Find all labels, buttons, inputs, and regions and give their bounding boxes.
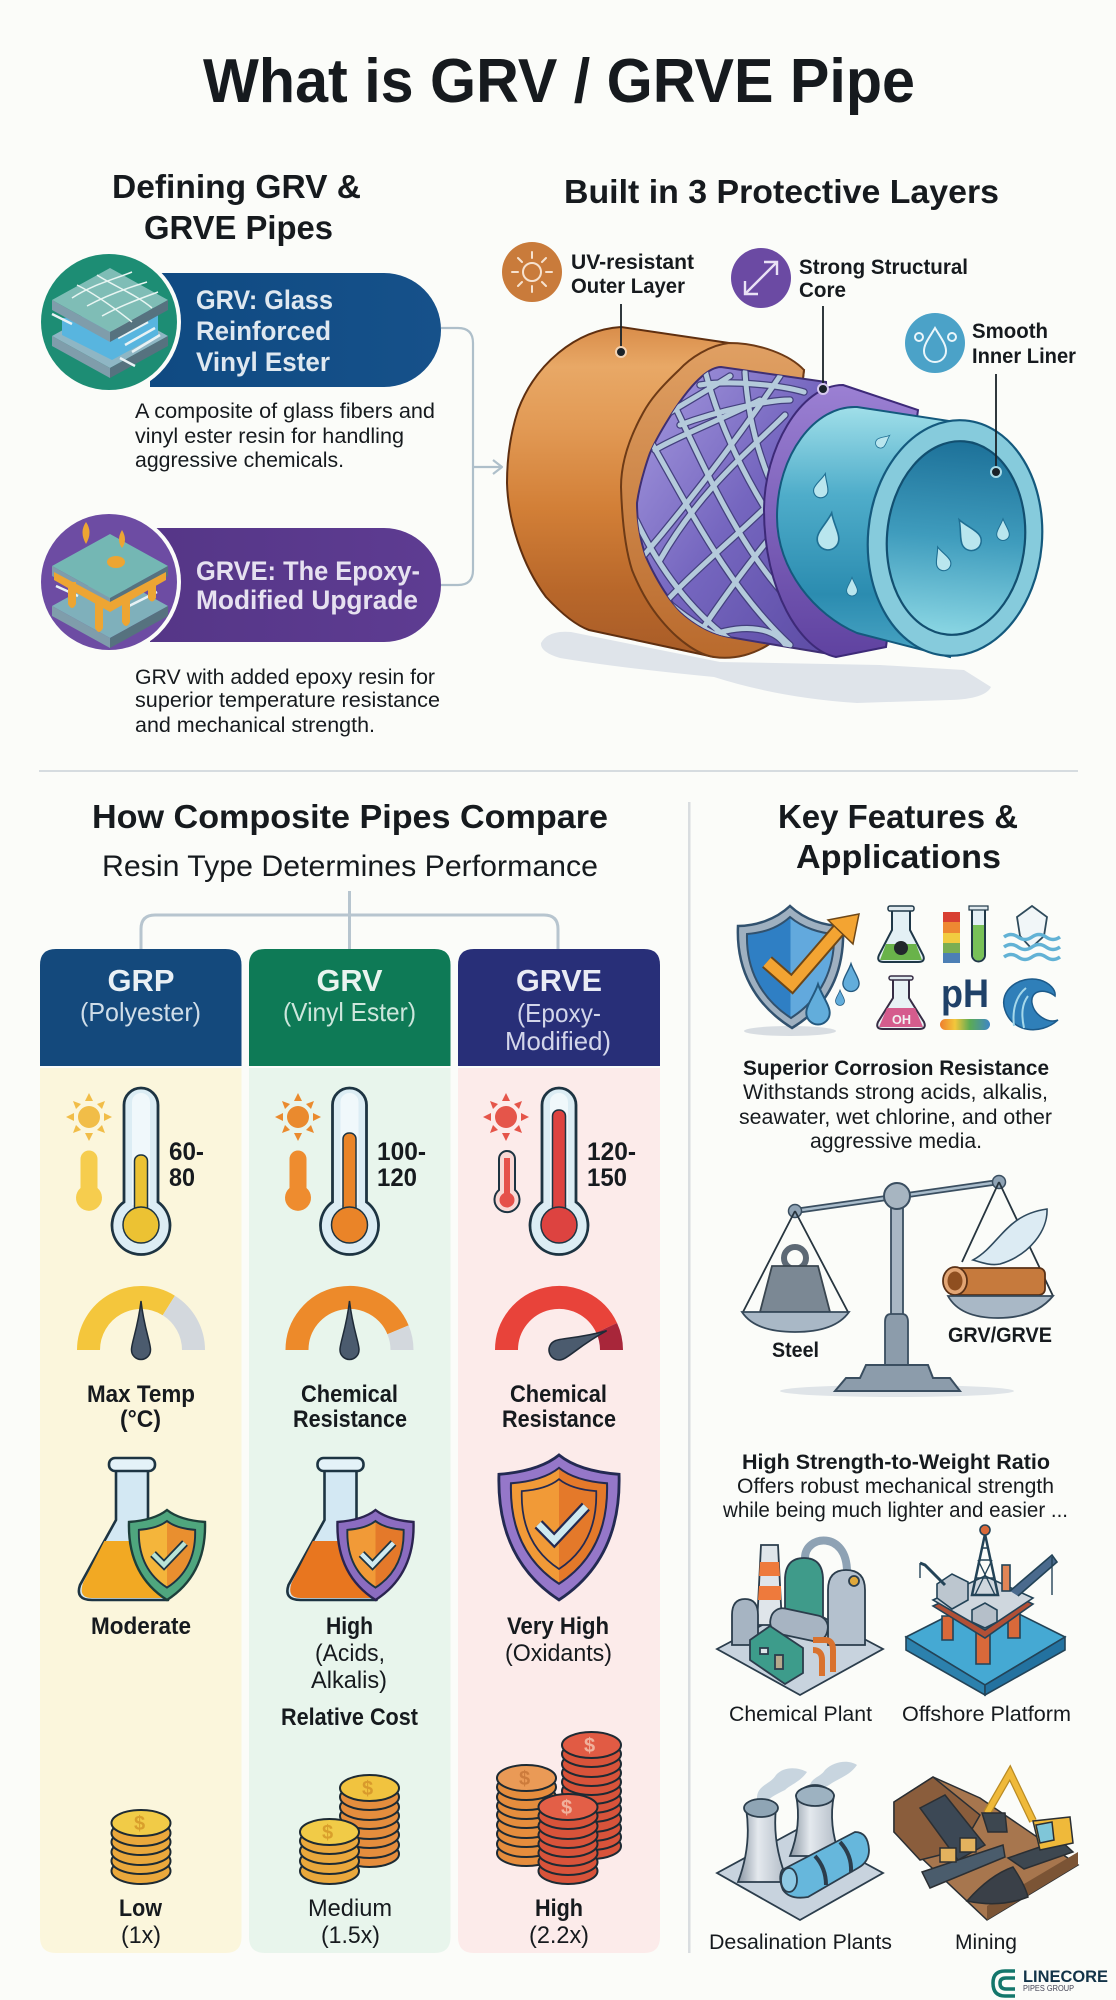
icon: mining site (894, 1773, 1078, 1920)
value: 60-80 (169, 1138, 204, 1192)
pill: GRV (150, 273, 441, 387)
icon: flask with green shield (79, 1458, 205, 1600)
text: strength-to-weight (722, 1451, 1068, 1522)
label: chemical resistance: Resistance (293, 1406, 407, 1433)
icon: GRVE layered composite (37, 510, 181, 654)
value: very high oxidants: (Oxidants) (505, 1640, 612, 1667)
woven purple core (636, 367, 836, 655)
text: corrosion resistance: seawater, wet chlorine, and other (739, 1106, 1052, 1129)
thermometer: GRV (320, 1088, 378, 1254)
gauge: GRP (88, 1298, 194, 1360)
label: max temp (87, 1381, 195, 1433)
value: high acids alkalis: High (326, 1613, 373, 1640)
text: GRV description: vinyl ester resin for handling (135, 425, 404, 448)
icon: small thermometer (76, 1150, 102, 1211)
label: steel: Steel (772, 1339, 819, 1362)
icon: sun (483, 1093, 529, 1141)
value: very high oxidants: Very High (507, 1613, 609, 1640)
value: 120-150: 150 (587, 1164, 627, 1192)
column connector (141, 891, 558, 949)
value: low: Low (119, 1895, 162, 1922)
value: high cost: High (535, 1895, 583, 1922)
icon: shield with arrow check (738, 906, 859, 1036)
value: high cost: (2.2x) (529, 1922, 589, 1949)
text: GRVE description: GRV with added epoxy resin for (135, 666, 435, 689)
label: chemical resistance (502, 1381, 616, 1433)
text: strength-to-weight: Offers robust mechanical strength (737, 1475, 1054, 1498)
icon: pH label and bar: pH (941, 972, 989, 1016)
panel: protective layers (502, 173, 1076, 703)
pipe illustration (507, 327, 1052, 663)
label: desalination plants: Desalination Plants (709, 1931, 892, 1954)
header: GRVE: (Epoxy- (517, 998, 601, 1028)
header: GRP: (Polyester) (80, 997, 201, 1027)
orange outer layer (507, 327, 804, 658)
pipe shadow (541, 632, 991, 703)
icon: coin stacks medium: $ (322, 1822, 333, 1844)
callout: UV-resistant outer layer (502, 242, 694, 357)
label: GRV/GRVE: GRV/GRVE (948, 1324, 1052, 1347)
value: 60-80: 60- (169, 1138, 204, 1166)
right pan (948, 1296, 1053, 1318)
pill: GRV: GRV: Glass (196, 285, 333, 315)
value: low: (1x) (121, 1922, 161, 1949)
composite pipe on pan (943, 1267, 1045, 1295)
callout: strong structural core: Core (799, 279, 846, 302)
value: 100-120: 100- (377, 1138, 426, 1166)
icon: green flask (878, 906, 924, 962)
icon: pink flask OH (877, 976, 925, 1029)
icon: coin stacks medium (300, 1775, 399, 1884)
heading: features: Key Features & (778, 798, 1018, 835)
heading: features (778, 798, 1018, 875)
callout: strong structural core (731, 248, 968, 394)
icon: pH label and bar (940, 972, 990, 1030)
pill: GRVE (150, 528, 441, 642)
heading: defining: Defining GRV & (112, 168, 361, 205)
label: chemical resistance: Resistance (502, 1406, 616, 1433)
icon: offshore platform (906, 1525, 1065, 1695)
thermometer: GRVE (530, 1088, 588, 1254)
blue tube mouth (858, 413, 1052, 663)
value: high acids alkalis: (Acids, (315, 1640, 385, 1667)
column: GRV (249, 949, 450, 1953)
text: GRV description (135, 400, 435, 472)
label: mining: Mining (955, 1931, 1017, 1954)
icon: small thermometer (285, 1150, 311, 1211)
value: moderate: Moderate (91, 1613, 191, 1640)
label: chemical resistance: Chemical (301, 1381, 398, 1408)
value: high acids alkalis (311, 1613, 387, 1694)
icon: flask with purple shield (287, 1458, 414, 1600)
header: GRV: GRV (316, 963, 383, 998)
logo: LINECORE (1023, 1967, 1108, 1986)
header: GRVE: GRVE (516, 963, 602, 998)
icon: desalination plant (717, 1762, 883, 1920)
pill: GRV: Vinyl Ester (196, 347, 330, 377)
column: GRVE (458, 949, 660, 1953)
callout: smooth inner liner: Smooth (972, 320, 1048, 343)
header: GRP (40, 949, 242, 1066)
label: chemical resistance (293, 1381, 407, 1433)
value: high acids alkalis: Alkalis) (311, 1667, 387, 1694)
icon: coin stack low (112, 1810, 170, 1884)
callout: smooth inner liner: Inner Liner (972, 345, 1076, 368)
column: GRP (40, 949, 242, 1953)
value: very high oxidants (505, 1613, 612, 1667)
water droplets (812, 432, 1009, 596)
left pan (742, 1312, 849, 1332)
value: 100-120 (377, 1138, 426, 1192)
gauge: GRV (297, 1297, 402, 1360)
text: GRV description: aggressive chemicals. (135, 449, 344, 472)
text: GRVE description (135, 666, 440, 737)
subheading: Resin Type Determines Performance (102, 850, 598, 883)
text: GRV description: A composite of glass fibers and (135, 400, 435, 423)
label: chemical resistance: Chemical (510, 1381, 607, 1408)
header: GRV (249, 949, 450, 1066)
label: max temp: (°C) (120, 1406, 161, 1433)
callout: UV-resistant outer layer: Outer Layer (571, 275, 685, 298)
icon: sun (66, 1093, 112, 1141)
label: chemical plant: Chemical Plant (729, 1703, 872, 1726)
icon: sun (275, 1093, 321, 1141)
panel: defining GRV and GRVE (37, 168, 502, 737)
panel: key features and applications (709, 798, 1108, 1996)
pill: GRVE: GRVE: The Epoxy- (196, 556, 420, 586)
header: GRP: GRP (108, 963, 174, 998)
header: GRVE (458, 949, 660, 1066)
icon: coin stacks medium: $ (362, 1778, 373, 1800)
body: GRP (40, 1068, 242, 1953)
logo: PIPES GROUP (1023, 1984, 1074, 1993)
icon: small thermometer (494, 1151, 519, 1212)
text: strength-to-weight: while being much lighter and easier ... (722, 1499, 1068, 1522)
header: GRV: (Vinyl Ester) (283, 997, 416, 1027)
body: GRVE (458, 1068, 660, 1953)
blue inner liner body (777, 407, 975, 657)
icon: coin stacks high: $ (561, 1797, 572, 1819)
icon: ocean wave (1004, 979, 1058, 1030)
illustration: balance scale (742, 1176, 1053, 1397)
label: offshore platform: Offshore Platform (902, 1703, 1071, 1726)
label: max temp: Max Temp (87, 1381, 195, 1408)
value: medium: Medium (308, 1895, 392, 1922)
title: What is GRV / GRVE Pipe (203, 47, 915, 116)
icon: coin stack low: $ (134, 1813, 145, 1835)
label: relative cost: Relative Cost (281, 1704, 418, 1731)
logo (993, 1967, 1108, 1996)
heading: layers: Built in 3 Protective Layers (564, 173, 999, 210)
text: corrosion resistance: Withstands strong acids, alkalis, (743, 1081, 1048, 1104)
body: GRV (249, 1068, 450, 1953)
icon: coin stacks high: $ (584, 1735, 595, 1757)
gauge: GRVE (506, 1297, 612, 1363)
icon: chemical plant (717, 1541, 883, 1695)
header: GRVE: Modified) (505, 1026, 611, 1056)
feather (973, 1209, 1047, 1265)
value: 100-120: 120 (377, 1164, 417, 1192)
heading: comparison: How Composite Pipes Compare (92, 798, 608, 835)
purple structural band (764, 385, 918, 657)
icon: coin stacks high: $ (519, 1768, 530, 1790)
heading: features: Applications (796, 838, 1001, 875)
pill: GRV: Reinforced (196, 316, 331, 346)
callout: smooth inner liner (905, 313, 1076, 477)
text: corrosion resistance (739, 1057, 1052, 1153)
value: 60-80: 80 (169, 1164, 195, 1192)
icon: crystal over seawater (1004, 906, 1060, 960)
text: GRVE description: and mechanical strength. (135, 714, 375, 737)
icon: GRV layered composite (37, 250, 181, 394)
panel: comparison (40, 798, 660, 1953)
callout: UV-resistant outer layer: UV-resistant (571, 251, 694, 274)
arrow connector (441, 328, 502, 585)
icon: coin stacks high (497, 1732, 621, 1884)
text: strength-to-weight: High Strength-to-Weight Ratio (742, 1451, 1050, 1474)
heading: defining (112, 168, 361, 246)
icon: large shield (499, 1455, 619, 1600)
weight (760, 1247, 830, 1312)
text: GRVE description: superior temperature resistance (135, 689, 440, 712)
icon: pH strip and test tube (943, 906, 988, 963)
value: low (119, 1895, 162, 1949)
heading: defining: GRVE Pipes (144, 209, 333, 246)
pill: GRVE: Modified Upgrade (196, 585, 418, 615)
value: medium: (1.5x) (321, 1922, 380, 1949)
value: high cost (529, 1895, 589, 1949)
icon: pink flask OH: OH (892, 1012, 911, 1027)
callout: strong structural core: Strong Structural (799, 256, 968, 279)
value: 120-150 (587, 1138, 636, 1192)
text: corrosion resistance: Superior Corrosion Resistance (743, 1057, 1049, 1080)
text: corrosion resistance: aggressive media. (810, 1130, 982, 1153)
value: medium (308, 1895, 392, 1949)
thermometer: GRP (112, 1088, 170, 1254)
value: 120-150: 120- (587, 1138, 636, 1166)
